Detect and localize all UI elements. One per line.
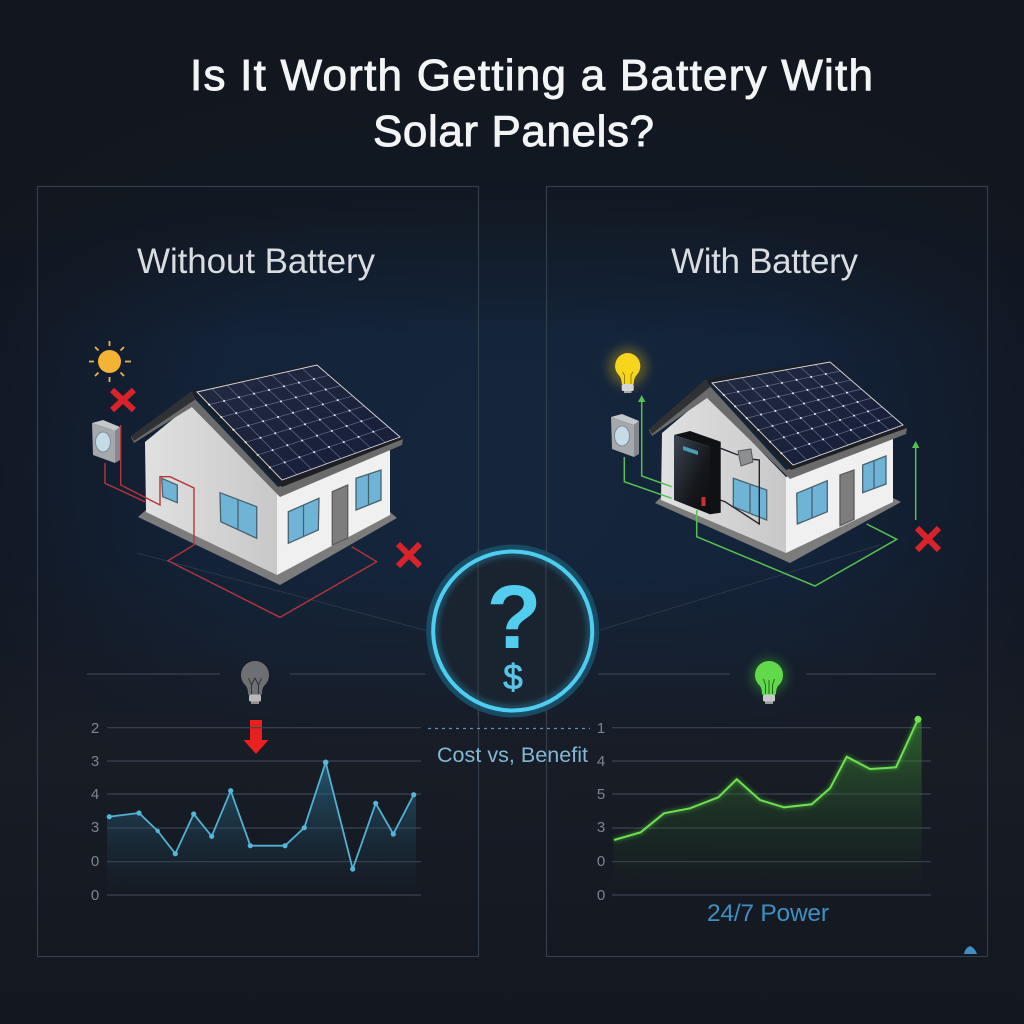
y axis labels	[91, 720, 99, 904]
wiring: black	[720, 448, 759, 524]
dollar sign: $	[503, 658, 523, 697]
title	[190, 51, 873, 156]
y axis labels: 0	[597, 887, 605, 904]
icon: grey bulb	[241, 661, 269, 704]
y axis labels: 0	[91, 887, 99, 904]
glow	[614, 719, 918, 840]
wiring: red	[105, 425, 377, 617]
line	[109, 762, 414, 869]
wiring: green	[624, 398, 916, 586]
label: cost vs benefit: Cost vs, Benefit	[437, 743, 588, 767]
y axis labels: 3	[597, 819, 605, 836]
y axis labels: 2	[91, 720, 99, 737]
solar panel	[712, 362, 903, 465]
line	[614, 719, 918, 840]
y axis labels: 1	[597, 720, 605, 737]
chart: without battery	[91, 720, 421, 904]
icon: sun	[89, 341, 131, 382]
y axis labels: 3	[91, 819, 99, 836]
y axis labels: 4	[91, 786, 99, 803]
windows and door	[162, 470, 381, 545]
chart: with battery	[597, 716, 931, 904]
heading: without battery: Without Battery	[137, 242, 376, 281]
area	[613, 719, 922, 890]
data points	[107, 760, 416, 872]
icon: red cross top	[112, 390, 134, 410]
y axis labels: 4	[597, 753, 605, 770]
dotted cost line	[428, 728, 590, 730]
y axis labels: 0	[91, 853, 99, 870]
windows and door	[733, 456, 886, 526]
y axis labels	[597, 720, 605, 904]
title: Is It Worth Getting a Battery With	[190, 51, 873, 100]
title: Solar Panels?	[373, 107, 654, 156]
area	[107, 762, 416, 890]
icon: red cross with battery	[917, 528, 939, 550]
label: 24/7 power: 24/7 Power	[707, 900, 829, 927]
arrowheads: green	[638, 395, 919, 448]
icon: electric meter with battery	[611, 414, 639, 457]
y axis labels: 0	[597, 853, 605, 870]
center question badge	[430, 548, 596, 714]
inverter box	[738, 449, 753, 466]
solar panel	[197, 365, 400, 480]
y axis labels: 5	[597, 786, 605, 803]
divider rows beside bulbs	[87, 673, 936, 675]
icon: electric meter	[92, 420, 120, 463]
panel: with battery frame	[546, 186, 988, 956]
y axis labels: 3	[91, 753, 99, 770]
question mark: ?	[487, 568, 541, 668]
heading: with battery: With Battery	[671, 242, 858, 281]
icon: corner marker	[964, 946, 977, 954]
home battery	[674, 431, 721, 514]
end point	[914, 716, 922, 723]
icon: red down arrow	[244, 720, 268, 754]
icon: green bulb	[751, 658, 787, 704]
icon: red cross right	[398, 544, 420, 566]
diagonal connector lines	[137, 545, 880, 631]
house: with battery	[649, 360, 907, 563]
panel: without battery frame	[38, 186, 478, 956]
icon: yellow bulb	[608, 347, 648, 393]
house: without battery	[131, 363, 403, 585]
